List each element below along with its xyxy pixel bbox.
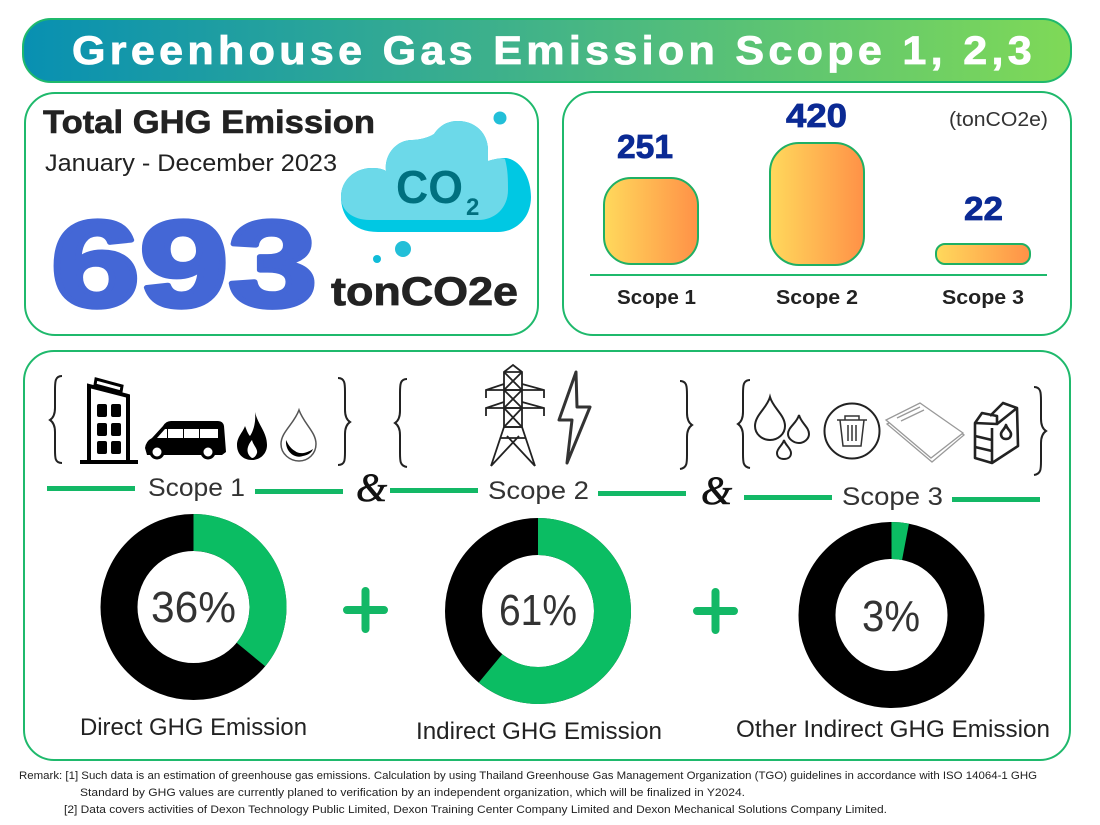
total value: 693: [51, 196, 317, 332]
title: Greenhouse Gas Emission Scope 1, 2,3: [72, 29, 1036, 73]
caption: scope 2: Indirect GHG Emission: [416, 718, 662, 745]
heading: scope 3: [744, 483, 1040, 511]
axis label: scope 1: Scope 1: [617, 287, 696, 309]
axis label: scope 2: Scope 2: [776, 287, 858, 309]
ampersand 2: &: [701, 468, 732, 513]
icons: scope 3 sources: [738, 380, 1046, 475]
caption: scope 1: Direct GHG Emission: [80, 714, 307, 741]
panel: scope breakdown: [24, 351, 1070, 760]
donut chart: scope 3: [817, 540, 966, 690]
ampersand 1: &: [356, 465, 387, 510]
heading: scope 1: Scope 1: [148, 474, 245, 502]
donut chart: scope 3: 3%: [862, 592, 920, 641]
bar: scope 2: [770, 143, 864, 265]
remarks: Standard by GHG values are currently planed to verification by an independent organization, which will be finalized in Y2024.: [80, 787, 745, 799]
icon: CO2 cloud: [341, 112, 531, 263]
caption: scope 3: Other Indirect GHG Emission: [736, 716, 1050, 743]
heading: scope 1: [47, 474, 343, 502]
remarks: Remark: [1] Such data is an estimation of greenhouse gas emissions. Calculation by using Thailand Greenhouse Gas Management Organization (TGO) guidelines in accordance with ISO 14064-1 GHG: [19, 770, 1037, 782]
donut chart: scope 1: [119, 532, 268, 682]
heading: scope 3: Scope 3: [842, 483, 943, 511]
donut chart: scope 1: 36%: [151, 583, 236, 632]
bar: scope 3: [936, 244, 1030, 264]
plus sign 2: [697, 592, 734, 630]
remarks: [19, 770, 1037, 816]
heading: scope 2: [390, 477, 686, 505]
remarks: [2] Data covers activities of Dexon Technology Public Limited, Dexon Training Center Company Limited and Dexon Mechanical Solutions Company Limited.: [64, 804, 887, 816]
unit: tonCO2e: [331, 270, 518, 314]
plus sign 1: [347, 591, 384, 629]
unit label: (tonCO2e): [949, 109, 1048, 131]
panel: total GHG emission: [25, 93, 538, 335]
panel: scope bar chart: [563, 92, 1071, 335]
icon: CO2 cloud: CO: [396, 161, 463, 213]
value: 251: 251: [617, 128, 673, 165]
donut chart: scope 2: [464, 536, 612, 686]
icon: CO2 cloud: 2: [466, 194, 479, 221]
icons: scope 1 sources: [50, 376, 350, 465]
icons: scope 2 sources: [395, 365, 692, 469]
donut chart: scope 2: 61%: [499, 586, 577, 635]
heading: total GHG emission: Total GHG Emission: [43, 104, 375, 140]
heading: scope 2: Scope 2: [488, 477, 589, 505]
value: 420: 420: [786, 97, 847, 134]
period text: January - December 2023: [45, 150, 337, 177]
value: 22: 22: [964, 190, 1003, 227]
bar: scope 1: [604, 178, 698, 264]
axis label: scope 3: Scope 3: [942, 287, 1024, 309]
title banner: [23, 19, 1071, 82]
